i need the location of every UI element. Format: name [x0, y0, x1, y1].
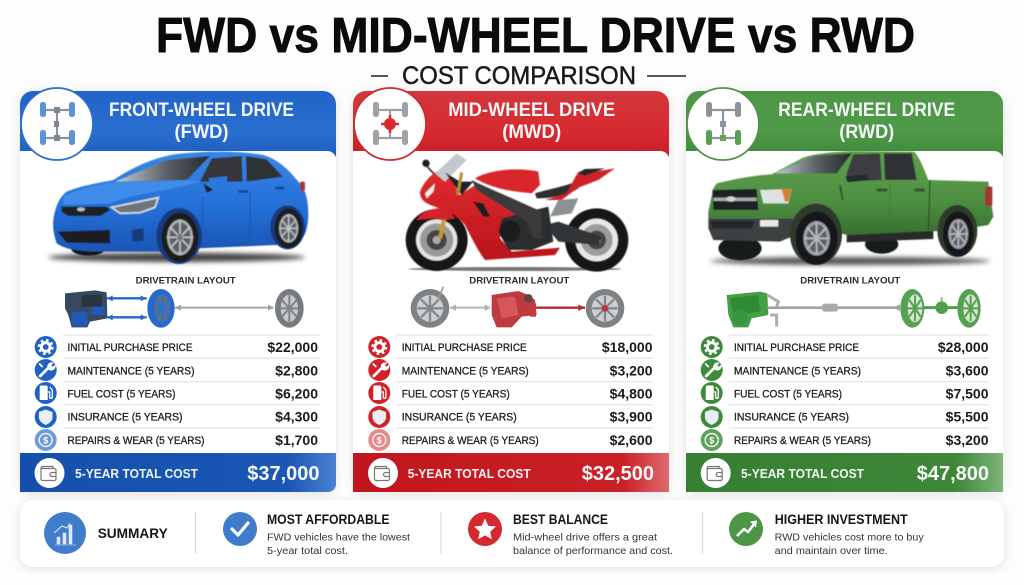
panel header band — [686, 91, 1003, 157]
row: maintenance — [368, 359, 653, 381]
total cost bar — [20, 453, 336, 492]
summary item: best balance — [468, 512, 673, 557]
front wheel — [406, 209, 468, 271]
heading: rear-wheel drive — [778, 100, 955, 143]
row: repairs and wear: $ — [43, 436, 48, 446]
heading: mid-wheel drive: MID-WHEEL DRIVE — [448, 100, 615, 121]
row: fuel cost: FUEL COST (5 YEARS) — [734, 388, 842, 400]
row: insurance: INSURANCE (5 YEARS) — [402, 412, 517, 424]
row: fuel cost: $6,200 — [275, 385, 318, 401]
row: fuel cost: $4,800 — [610, 385, 653, 401]
cost table — [701, 335, 989, 451]
cost table — [368, 335, 653, 451]
panel card background — [353, 91, 669, 492]
total cost bar: 5-YEAR TOTAL COST — [408, 466, 531, 481]
row: repairs and wear — [701, 429, 989, 451]
total cost bar — [686, 453, 1003, 492]
summary item: higher investment: HIGHER INVESTMENT — [775, 512, 908, 527]
summary item: best balance: Mid-wheel drive offers a great — [513, 532, 657, 544]
row: fuel cost: $7,500 — [946, 385, 989, 401]
row: repairs and wear: $1,700 — [275, 432, 318, 448]
summary heading with chart icon: SUMMARY — [98, 525, 168, 541]
row: fuel cost — [368, 382, 653, 404]
summary card background — [20, 500, 1004, 567]
panel: mid-wheel drive — [353, 88, 669, 492]
panel header band — [353, 91, 669, 157]
row: maintenance — [701, 359, 989, 381]
row: initial purchase price: INITIAL PURCHASE PRICE — [402, 342, 527, 354]
row: insurance: $3,900 — [610, 409, 653, 425]
summary item: higher investment — [729, 512, 924, 557]
summary item: higher investment: RWD vehicles cost more to buy — [775, 532, 924, 544]
row: initial purchase price — [701, 336, 989, 358]
row: insurance: $4,300 — [275, 409, 318, 425]
summary item: most affordable — [223, 512, 410, 557]
total cost bar: 5-YEAR TOTAL COST — [741, 466, 864, 481]
row: repairs and wear — [35, 429, 318, 451]
heading: rear-wheel drive: (RWD) — [839, 122, 894, 143]
illustration: green pickup truck — [708, 151, 993, 265]
heading: mid-wheel drive — [448, 100, 615, 143]
subtitle: cost comparison: COST COMPARISON — [402, 62, 636, 90]
diagram: rwd drivetrain — [727, 289, 981, 328]
row: insurance — [35, 406, 318, 428]
title: FWD vs MID-WHEEL DRIVE vs RWD — [156, 9, 915, 63]
row: insurance: INSURANCE (5 YEARS) — [734, 412, 849, 424]
diagram: mid-wheel drivetrain — [411, 287, 624, 328]
illustration: blue hatchback — [48, 152, 308, 264]
total cost bar — [353, 453, 669, 492]
row: fuel cost: FUEL COST (5 YEARS) — [68, 388, 176, 400]
summary item: best balance: BEST BALANCE — [513, 512, 608, 527]
row: initial purchase price: INITIAL PURCHASE PRICE — [734, 342, 859, 354]
row: initial purchase price: $22,000 — [267, 339, 318, 355]
row: fuel cost — [701, 382, 989, 404]
total cost bar: 5-YEAR TOTAL COST — [75, 466, 198, 481]
total cost bar: $47,800 — [917, 463, 989, 485]
row: repairs and wear: REPAIRS & WEAR (5 YEARS) — [734, 435, 871, 447]
row: insurance: $5,500 — [946, 409, 989, 425]
row: fuel cost: FUEL COST (5 YEARS) — [402, 388, 510, 400]
heading: front-wheel drive — [109, 100, 294, 143]
label: drivetrain layout: DRIVETRAIN LAYOUT — [469, 276, 569, 286]
summary item: higher investment: and maintain over time. — [775, 545, 888, 557]
row: fuel cost — [35, 382, 318, 404]
heading: mid-wheel drive: (MWD) — [502, 122, 561, 143]
heading: rear-wheel drive: REAR-WHEEL DRIVE — [778, 100, 955, 121]
row: initial purchase price — [368, 336, 653, 358]
row: insurance — [701, 406, 989, 428]
row: initial purchase price — [35, 336, 318, 358]
row: initial purchase price: $28,000 — [938, 339, 989, 355]
cost table — [35, 335, 320, 451]
label: drivetrain layout: DRIVETRAIN LAYOUT — [800, 276, 900, 286]
row: insurance: INSURANCE (5 YEARS) — [68, 412, 182, 424]
summary heading with chart icon — [44, 512, 168, 554]
row: maintenance: $2,800 — [275, 362, 318, 378]
row: repairs and wear: $2,600 — [610, 432, 653, 448]
heading: front-wheel drive: (FWD) — [174, 122, 228, 143]
icon: drivetrain badge — [21, 88, 93, 160]
row: repairs and wear — [368, 429, 653, 451]
row: maintenance: MAINTENANCE (5 YEARS) — [68, 365, 194, 377]
panel: front-wheel drive — [20, 88, 336, 492]
total cost bar: $32,500 — [582, 463, 654, 485]
diagram: fwd drivetrain — [65, 289, 304, 328]
row: repairs and wear: $ — [709, 436, 714, 446]
row: initial purchase price: INITIAL PURCHASE PRICE — [68, 342, 192, 354]
total cost bar: $37,000 — [247, 463, 320, 485]
panel: rear-wheel drive — [686, 88, 1003, 492]
summary item: best balance: balance of performance and cost. — [513, 545, 673, 557]
panel card background — [20, 91, 336, 492]
row: repairs and wear: REPAIRS & WEAR (5 YEARS) — [68, 435, 204, 447]
icon: drivetrain badge — [354, 88, 426, 160]
row: maintenance: $3,600 — [946, 362, 989, 378]
rear wheel — [565, 208, 628, 272]
heading: front-wheel drive: FRONT-WHEEL DRIVE — [109, 100, 294, 121]
row: initial purchase price: $18,000 — [602, 339, 653, 355]
panel card background — [686, 91, 1003, 492]
row: maintenance: $3,200 — [610, 362, 653, 378]
panel: summary — [20, 500, 1004, 567]
row: repairs and wear: $ — [377, 436, 382, 446]
row: repairs and wear: $3,200 — [946, 432, 989, 448]
summary item: most affordable: MOST AFFORDABLE — [267, 512, 390, 527]
row: repairs and wear: REPAIRS & WEAR (5 YEARS) — [402, 435, 539, 447]
summary item: most affordable: 5-year total cost. — [267, 545, 348, 557]
row: maintenance: MAINTENANCE (5 YEARS) — [402, 365, 529, 377]
row: insurance — [368, 406, 653, 428]
illustration: red motorcycle — [406, 153, 628, 272]
summary item: most affordable: FWD vehicles have the lowest — [267, 532, 410, 544]
icon: drivetrain badge — [687, 88, 759, 160]
panel header band — [20, 91, 336, 157]
label: drivetrain layout: DRIVETRAIN LAYOUT — [136, 276, 236, 286]
row: maintenance — [35, 359, 318, 381]
row: maintenance: MAINTENANCE (5 YEARS) — [734, 365, 861, 377]
